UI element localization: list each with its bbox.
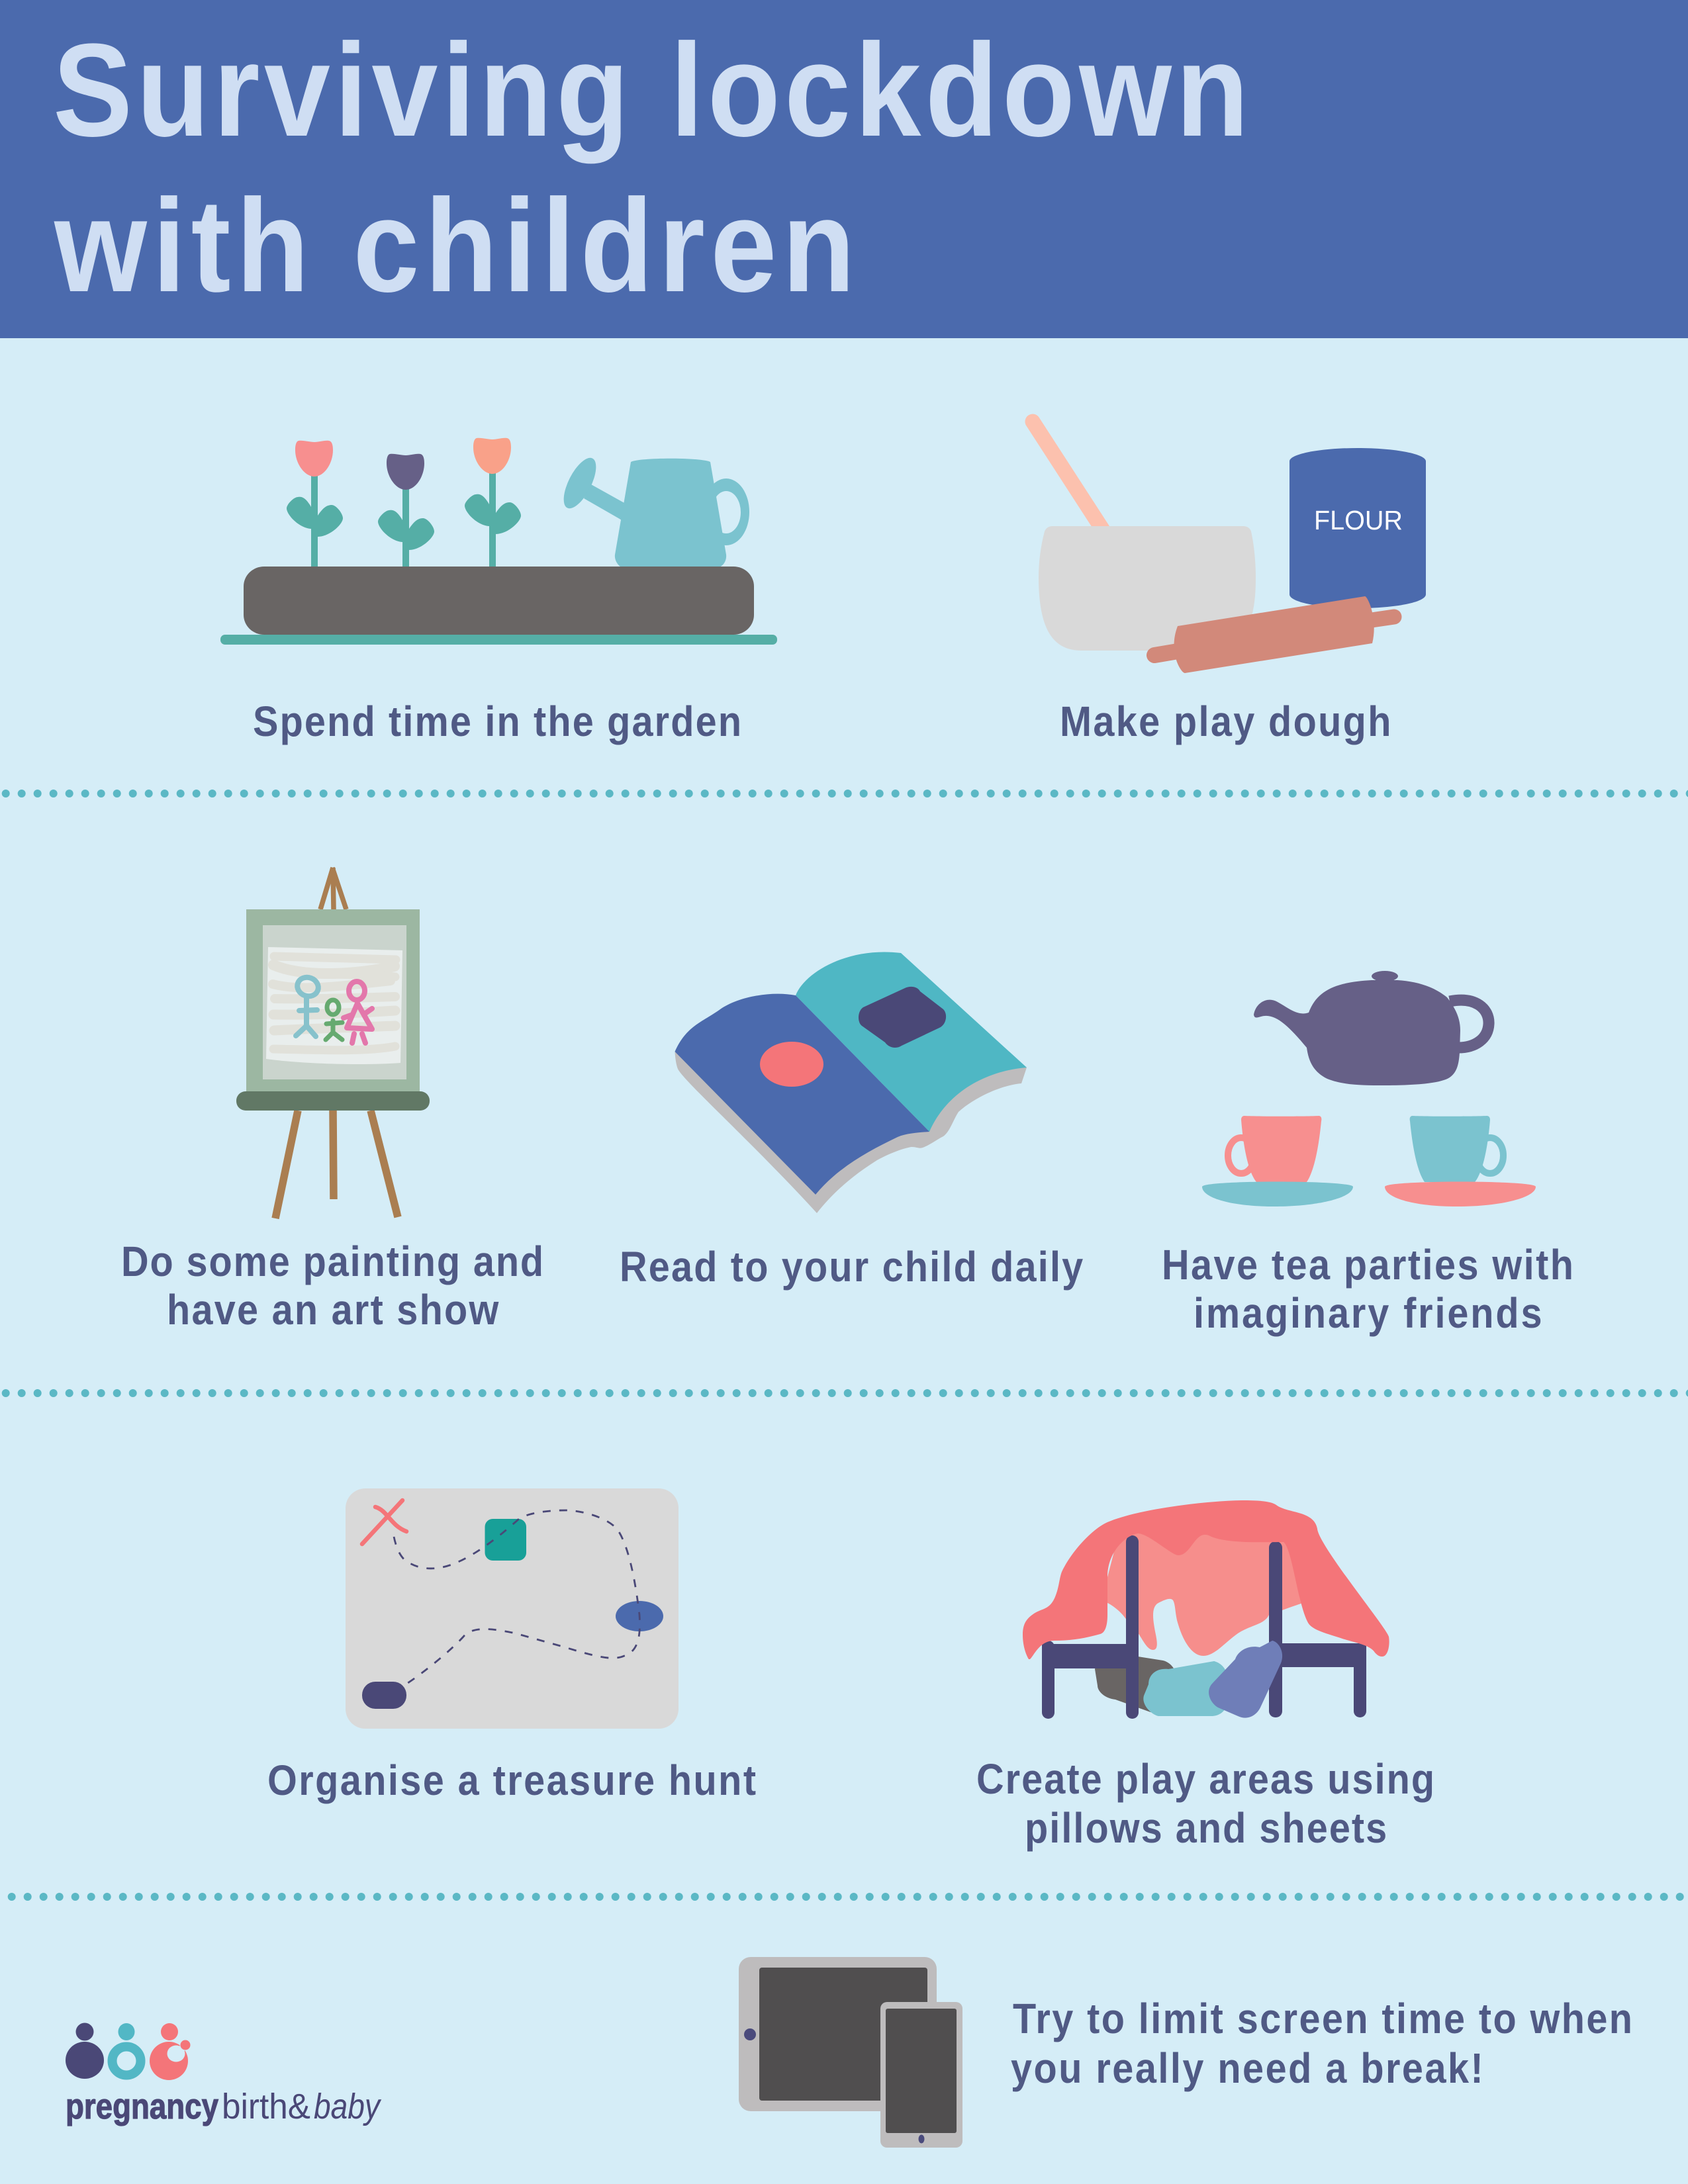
- flower: purple tulip: [378, 454, 434, 569]
- label: play areas: pillows and sheets: [1025, 1804, 1387, 1852]
- logo wordmark: pregnancy: [66, 2087, 218, 2126]
- label: tea party: Have tea parties with: [1162, 1241, 1573, 1289]
- cup: coral: [1228, 1116, 1321, 1182]
- label: garden: Spend time in the garden: [253, 698, 741, 745]
- logo: pregnancy birth and baby: [66, 2023, 382, 2126]
- start pill: [362, 1682, 406, 1709]
- stick figure: pink: [344, 981, 372, 1043]
- label: treasure hunt: Organise a treasure hunt: [267, 1756, 756, 1804]
- phone: [880, 2002, 962, 2148]
- teal marker: [485, 1519, 526, 1561]
- watering can: [557, 453, 749, 568]
- label: read: Read to your child daily: [620, 1243, 1083, 1291]
- icon: easel with painting: [236, 868, 430, 1218]
- label: painting: [121, 1238, 543, 1334]
- left page: [675, 994, 929, 1195]
- map sheet: [346, 1488, 679, 1729]
- icon: teapot and cups: [1202, 971, 1536, 1206]
- stick figure: blue: [295, 974, 321, 1036]
- saucer: coral: [1385, 1182, 1536, 1206]
- grey pillow: [1095, 1655, 1178, 1714]
- icon: pillow fort: [1023, 1500, 1389, 1719]
- flower: pink tulip: [287, 441, 343, 569]
- label: screen time: [1011, 1995, 1632, 2092]
- title: Surviving lockdown: [53, 17, 1248, 164]
- label: painting: Do some painting and: [121, 1238, 543, 1285]
- header banner: [0, 0, 1688, 338]
- logo mark: three figures: [66, 2023, 191, 2080]
- background brush strokes: [273, 956, 396, 1050]
- mat: [263, 925, 406, 1079]
- flour canister: [1289, 448, 1426, 608]
- shelf: [220, 635, 777, 645]
- title: [53, 17, 1248, 320]
- front sheet: [1023, 1500, 1389, 1659]
- label: play dough: Make play dough: [1060, 698, 1391, 745]
- cup: teal: [1410, 1116, 1503, 1182]
- right page: [796, 952, 1027, 1132]
- bowl: [1039, 526, 1256, 651]
- icon: treasure map: [346, 1488, 679, 1729]
- dashed route: [394, 1510, 640, 1683]
- easel shelf: [236, 1091, 430, 1111]
- frame: [246, 909, 420, 1091]
- tablet: [739, 1957, 937, 2111]
- flower: orange tulip: [465, 438, 521, 569]
- back sheet: [1107, 1529, 1303, 1656]
- teal pillow: [1143, 1661, 1227, 1716]
- book edge: [675, 1052, 1027, 1213]
- icon: tablet and phone: [739, 1957, 962, 2148]
- easel legs: [275, 868, 398, 1218]
- chairs: [1042, 1535, 1366, 1719]
- blue marker: [616, 1601, 663, 1631]
- logo wordmark: birth&: [222, 2087, 310, 2126]
- icon: bowl, flour and rolling pin: [1033, 422, 1426, 673]
- teapot: [1254, 971, 1489, 1085]
- label: screen time: Try to limit screen time to when: [1013, 1995, 1632, 2042]
- logo wordmark: baby: [314, 2087, 382, 2126]
- soil bed: [244, 567, 754, 635]
- paper: [266, 947, 402, 1064]
- saucer: teal: [1202, 1182, 1353, 1206]
- dark picture: [859, 987, 946, 1048]
- blue pillow: [1209, 1641, 1282, 1718]
- icon: garden bed with tulips and watering can: [220, 438, 777, 645]
- red circle: [760, 1042, 823, 1087]
- spoon: [1033, 422, 1107, 536]
- label: tea party: [1162, 1241, 1573, 1337]
- label: tea party: imaginary friends: [1194, 1289, 1542, 1337]
- red X mark: [362, 1500, 406, 1544]
- label: painting: have an art show: [167, 1286, 499, 1334]
- label: play areas: [976, 1755, 1434, 1852]
- logo wordmark: [66, 2087, 382, 2126]
- flour canister: FLOUR: [1314, 505, 1403, 535]
- title: with children: [54, 172, 855, 320]
- label: play areas: Create play areas using: [976, 1755, 1434, 1803]
- stick figure: green: [326, 1000, 342, 1040]
- label: screen time: you really need a break!: [1011, 2044, 1483, 2092]
- icon: open book: [675, 952, 1027, 1213]
- rolling pin: [1154, 596, 1394, 673]
